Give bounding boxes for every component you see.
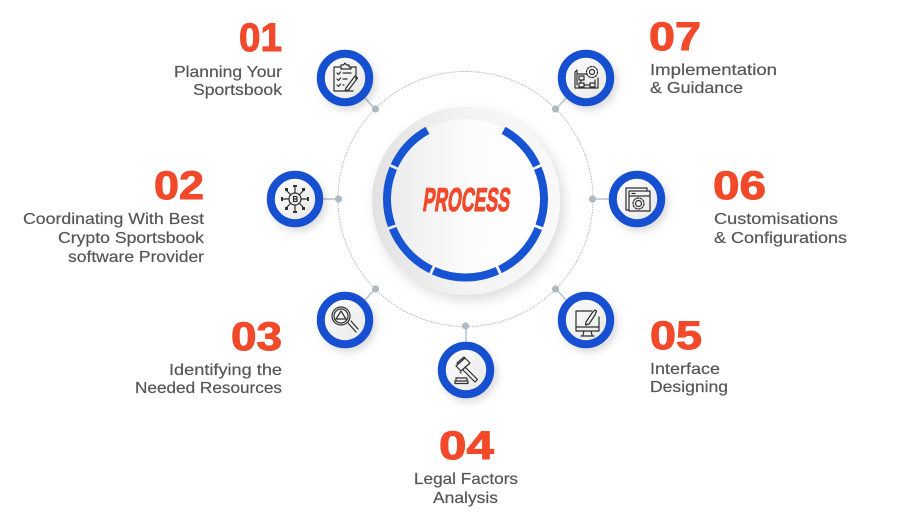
hub title: PROCESS [421, 181, 513, 218]
step 02 [23, 164, 319, 266]
step 01 number: 01 [239, 16, 282, 60]
step 04 label: Legal Factors [414, 471, 518, 488]
step 02 label: software Provider [68, 249, 205, 266]
step 01 [174, 16, 369, 102]
step 06 label: & Configurations [714, 230, 847, 247]
step 05 label: Interface [650, 361, 720, 378]
step 07 icon: gear and blueprint [562, 54, 610, 102]
dotted orbit with connector nodes [323, 72, 609, 343]
step 03 icon: magnifier with warning [321, 296, 369, 344]
step 03 label: Identifying the [169, 362, 282, 379]
step 01 label: Planning Your [174, 64, 283, 81]
step 06 label: Customisations [714, 211, 838, 228]
step 01 icon: clipboard [321, 54, 369, 102]
step 06 icon: browser settings [613, 175, 661, 223]
step 07 label: & Guidance [650, 80, 743, 97]
step 07 label: Implementation [650, 62, 777, 79]
step 04 label: Analysis [433, 490, 498, 507]
step 02 label: Crypto Sportsbook [58, 230, 205, 247]
step 05 number: 05 [650, 314, 702, 358]
step 07 [562, 15, 777, 102]
step 03 [135, 296, 369, 397]
segmented blue ring [359, 92, 572, 306]
step 02 icon: crypto network [271, 175, 319, 223]
step 05 [562, 296, 728, 396]
step 04 icon: gavel [442, 346, 490, 394]
step 02 number: 02 [154, 164, 204, 208]
step 01 label: Sportsbook [193, 82, 283, 99]
step 04 [414, 346, 518, 507]
step 03 number: 03 [231, 315, 282, 359]
step 05 label: Designing [650, 379, 728, 396]
central process hub [359, 92, 572, 306]
step 06 [613, 164, 847, 247]
step 03 label: Needed Resources [135, 380, 282, 397]
step 06 number: 06 [713, 164, 766, 208]
step 04 number: 04 [439, 424, 495, 468]
step 02 label: Coordinating With Best [23, 211, 205, 228]
step 07 number: 07 [649, 15, 701, 59]
step 05 icon: monitor with brush [562, 296, 610, 344]
